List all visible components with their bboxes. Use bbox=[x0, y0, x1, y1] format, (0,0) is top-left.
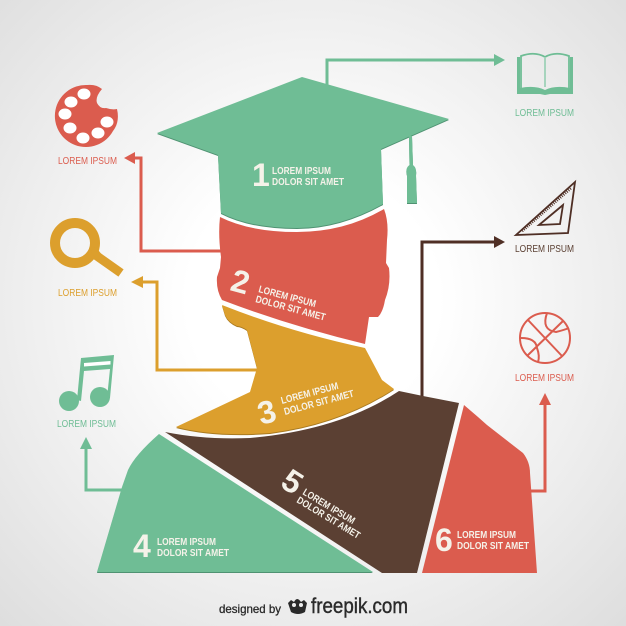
panel 2: head bbox=[217, 209, 390, 344]
panel 4: green shoulder bbox=[97, 434, 373, 572]
number 4: 4 bbox=[133, 528, 151, 564]
number 5: 5 bbox=[275, 462, 310, 502]
text 6 bbox=[457, 530, 529, 552]
panel 6: red arm bbox=[422, 405, 537, 573]
credit: freepik.com bbox=[311, 595, 408, 618]
cap tassel bbox=[406, 136, 417, 203]
label: set square: LOREM IPSUM bbox=[515, 244, 574, 255]
text 3: LOREM IPSUM bbox=[280, 381, 340, 407]
panel 1: graduation cap bbox=[157, 77, 449, 228]
text 1: LOREM IPSUM bbox=[272, 166, 331, 177]
icon: magnifier bbox=[55, 223, 121, 273]
number 6: 6 bbox=[435, 522, 453, 558]
icon: freepik logo bbox=[288, 599, 307, 614]
arrow: neck to magnifier bbox=[131, 276, 257, 370]
label: book: LOREM IPSUM bbox=[515, 108, 574, 119]
text 4 bbox=[157, 537, 229, 559]
arrow: arm to basketball bbox=[530, 393, 551, 491]
icon: basketball bbox=[520, 313, 570, 363]
label: magnifier: LOREM IPSUM bbox=[58, 288, 117, 299]
credit: designed by bbox=[219, 602, 281, 616]
text 5: DOLOR SIT AMET bbox=[294, 495, 362, 542]
text 2 bbox=[254, 284, 327, 324]
text 2: DOLOR SIT AMET bbox=[254, 294, 327, 324]
label: music note: LOREM IPSUM bbox=[57, 419, 116, 430]
icon: open book bbox=[517, 54, 573, 95]
text 6: DOLOR SIT AMET bbox=[457, 541, 529, 552]
text 5: LOREM IPSUM bbox=[300, 487, 357, 527]
arrow: chest to set square bbox=[422, 236, 505, 397]
arrow: cap to book bbox=[327, 54, 505, 86]
label: basketball: LOREM IPSUM bbox=[515, 373, 574, 384]
text 4: DOLOR SIT AMET bbox=[157, 548, 229, 559]
panel 3: neck bbox=[176, 305, 394, 434]
text 1: DOLOR SIT AMET bbox=[272, 177, 344, 188]
number 3: 3 bbox=[253, 392, 280, 432]
number 2: 2 bbox=[227, 262, 254, 301]
text 6: LOREM IPSUM bbox=[457, 530, 516, 541]
label: palette: LOREM IPSUM bbox=[58, 156, 117, 167]
panel 5: brown chest bbox=[165, 391, 459, 573]
text 4: LOREM IPSUM bbox=[157, 537, 216, 548]
text 3: DOLOR SIT AMET bbox=[283, 389, 355, 418]
arrow: head to palette bbox=[124, 152, 222, 251]
text 2: LOREM IPSUM bbox=[257, 284, 317, 310]
icon: palette bbox=[55, 85, 118, 147]
icon: set square bbox=[516, 182, 575, 235]
number 1: 1 bbox=[252, 157, 270, 193]
credit bbox=[219, 595, 408, 618]
text 1 bbox=[272, 166, 344, 188]
arrow: shoulder to music note bbox=[80, 437, 122, 490]
icon: music note bbox=[59, 355, 114, 411]
